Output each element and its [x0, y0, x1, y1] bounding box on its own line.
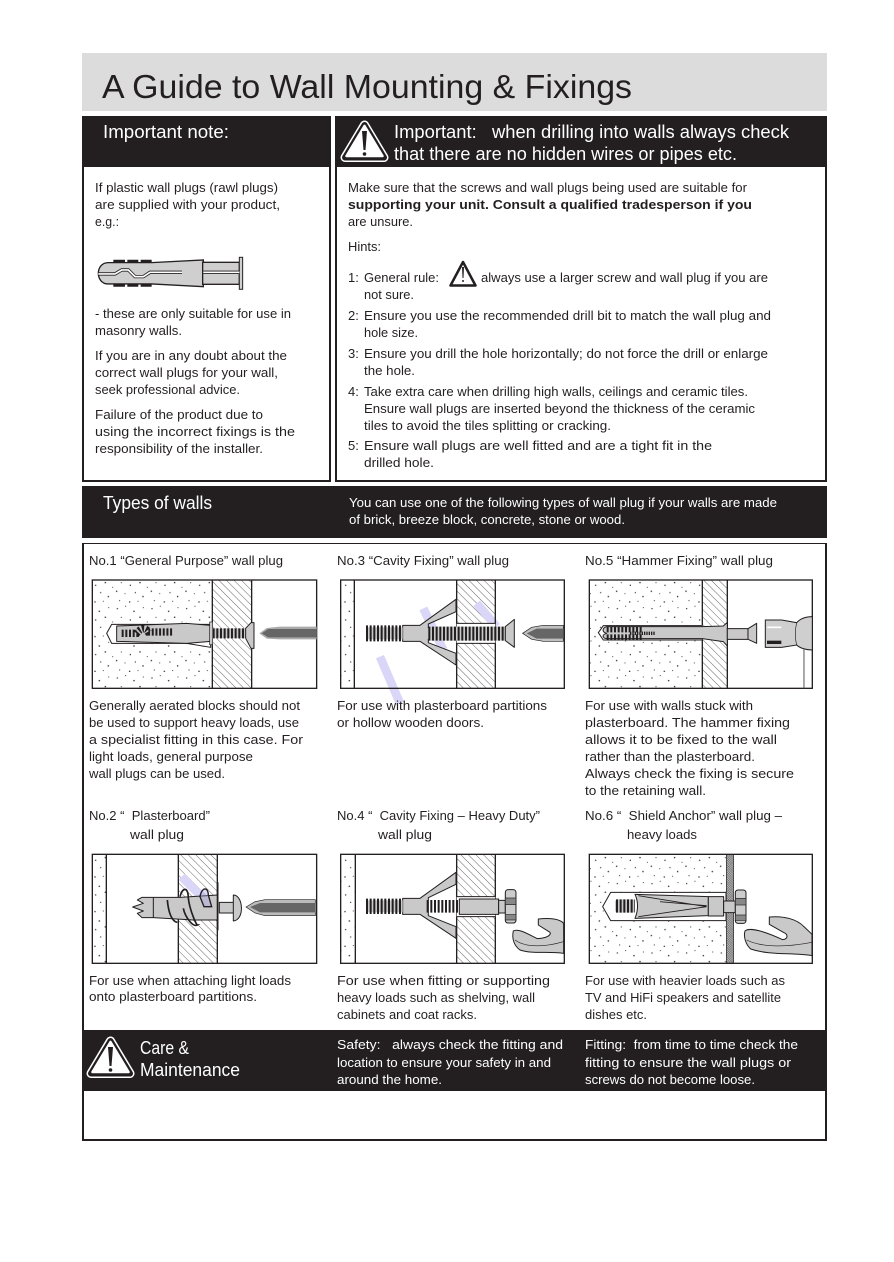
panel: important drilling warning and hints — [335, 116, 827, 481]
panel: important drilling warning and hints: Ensure you drill the hole horizontally; do not force the drill or enlarge — [364, 346, 768, 361]
panel: important drilling warning and hints: Hints: — [348, 239, 381, 254]
panel: important note: responsibility of the installer. — [95, 441, 263, 456]
panel: important drilling warning and hints: 4: — [348, 384, 359, 399]
panel: important note: masonry walls. — [95, 323, 182, 338]
description: No.5: Always check the fixing is secure — [585, 766, 794, 781]
panel: important drilling warning and hints: Ensure you use the recommended drill bit to match the wall plug and — [364, 308, 771, 323]
panel: important note: are supplied with your product, — [95, 197, 280, 212]
panel: care and maintenance band: Fitting: from time to time check the — [585, 1037, 798, 1052]
icon: warning triangle — [345, 125, 384, 158]
heading: No.6 Shield Anchor — [585, 808, 783, 842]
panel: care and maintenance band: Maintenance — [140, 1060, 240, 1080]
panel: important drilling warning and hints: Make sure that the screws and wall plugs being used are suitable for — [348, 180, 748, 195]
panel: important note: Important note: — [103, 122, 229, 142]
description: No.6: For use with heavier loads such as — [585, 973, 785, 988]
panel: important drilling warning and hints: Important: when drilling into walls always check — [394, 122, 790, 142]
description: No.3 — [337, 698, 548, 730]
panel: important drilling warning and hints: not sure. — [364, 287, 414, 302]
panel: care and maintenance band: around the home. — [337, 1072, 442, 1087]
panel: important note: If you are in any doubt about the — [95, 348, 287, 363]
panel: important drilling warning and hints: 5: — [348, 438, 359, 453]
panel: important drilling warning and hints: Ensure wall plugs are inserted beyond the thickness of the ceramic — [364, 401, 756, 416]
description: No.5: rather than the plasterboard. — [585, 749, 755, 764]
panel: care and maintenance band — [82, 1030, 827, 1091]
heading: No.4 Cavity Fixing Heavy Duty — [337, 808, 540, 842]
panel: care and maintenance band: Care & — [140, 1038, 189, 1058]
title banner: A Guide to Wall Mounting & Fixings — [102, 68, 632, 105]
description: No.3: or hollow wooden doors. — [337, 715, 484, 730]
icon: plastic wall plug — [98, 257, 243, 289]
heading band: types of walls: You can use one of the following types of wall plug if your walls are made — [349, 495, 777, 510]
diagram: No.1 General Purpose wall plug — [92, 580, 317, 688]
panel: important drilling warning and hints: always use a larger screw and wall plug if you are — [481, 270, 768, 285]
panel: important drilling warning and hints: tiles to avoid the tiles splitting or cracking. — [364, 418, 611, 433]
description: No.1 — [88, 698, 304, 781]
diagram: No.6 Shield Anchor wall plug — [589, 854, 812, 963]
panel: important drilling warning and hints: 1: — [348, 270, 359, 285]
description: No.5 — [585, 698, 794, 798]
panel: important note: - these are only suitable for use in — [95, 306, 291, 321]
description: No.6 — [585, 973, 785, 1022]
description: No.1: a specialist fitting in this case. For — [89, 732, 304, 747]
panel: important drilling warning and hints: drilled hole. — [364, 455, 434, 470]
panel: important note: seek professional advice. — [95, 382, 240, 397]
panel: important note: e.g.: — [95, 214, 119, 229]
panel frame: types of walls section — [82, 543, 827, 1140]
heading band: types of walls: of brick, breeze block, concrete, stone or wood. — [349, 512, 625, 527]
panel: important note: using the incorrect fixings is the — [95, 424, 295, 439]
panel: important drilling warning and hints: supporting your unit. Consult a qualified tradesperson if you — [348, 197, 752, 212]
description: No.5: plasterboard. The hammer fixing — [585, 715, 790, 730]
description: No.4 — [337, 973, 550, 1022]
icon: large wrench — [744, 917, 812, 956]
description: No.4: cabinets and coat racks. — [337, 1007, 477, 1022]
description: No.3: For use with plasterboard partitions — [337, 698, 548, 713]
panel: important note: Failure of the product due to — [95, 407, 263, 422]
panel: care and maintenance band: Safety: always check the fitting and — [337, 1037, 563, 1052]
panel: care and maintenance band: fitting to ensure the wall plugs or — [585, 1055, 792, 1070]
heading band: types of walls — [82, 486, 827, 538]
diagram: No.2 Plasterboard wall plug — [92, 854, 317, 963]
description: No.5: allows it to be fixed to the wall — [585, 732, 777, 747]
panel: important note — [82, 116, 331, 481]
panel: important drilling warning and hints: Take extra care when drilling high walls, ceilings and ceramic tiles. — [364, 384, 748, 399]
panel: important drilling warning and hints: 3: — [348, 346, 359, 361]
panel: important drilling warning and hints: 2: — [348, 308, 359, 323]
panel: important drilling warning and hints: General rule: — [364, 270, 439, 285]
description: No.1: light loads, general purpose — [89, 749, 253, 764]
description: No.2: For use when attaching light loads — [89, 973, 291, 988]
heading: No.4 Cavity Fixing Heavy Duty: No.4 “ Cavity Fixing – Heavy Duty” — [337, 808, 540, 823]
heading band: types of walls: Types of walls — [103, 493, 212, 513]
description: No.6: dishes etc. — [585, 1007, 647, 1022]
description: No.4: For use when fitting or supporting — [337, 973, 550, 988]
panel: important drilling warning and hints: are unsure. — [348, 214, 413, 229]
diagram: No.5 Hammer Fixing wall plug — [589, 580, 812, 688]
panel: care and maintenance band: screws do not become loose. — [585, 1072, 755, 1087]
heading: No.6 Shield Anchor: No.6 “ Shield Anchor” wall plug – — [585, 808, 783, 823]
panel: care and maintenance band: location to ensure your safety in and — [337, 1055, 551, 1070]
diagram: No.4 Cavity Fixing Heavy Duty wall plug — [341, 854, 564, 963]
diagram: No.3 Cavity Fixing wall plug — [341, 580, 564, 703]
description: No.1: be used to support heavy loads, use — [89, 715, 299, 730]
icon: small warning triangle — [450, 262, 476, 286]
heading: No.4 Cavity Fixing Heavy Duty: wall plug — [377, 827, 432, 842]
description: No.2: onto plasterboard partitions. — [89, 989, 257, 1004]
panel: important drilling warning and hints: that there are no hidden wires or pipes etc. — [394, 144, 737, 164]
heading: No.6 Shield Anchor: heavy loads — [627, 827, 697, 842]
panel: important drilling warning and hints: Ensure wall plugs are well fitted and are a tight fit in the — [364, 438, 712, 453]
heading: No.2 Plasterboard — [89, 808, 210, 842]
description: No.6: TV and HiFi speakers and satellite — [585, 990, 781, 1005]
icon: wrench — [513, 918, 564, 953]
panel: important drilling warning and hints: hole size. — [364, 325, 418, 340]
panel: important note: correct wall plugs for your wall, — [95, 365, 278, 380]
description: No.1: Generally aerated blocks should not — [89, 698, 300, 713]
description: No.4: heavy loads such as shelving, wall — [337, 990, 535, 1005]
description: No.2 — [89, 973, 291, 1004]
panel: important note: If plastic wall plugs (rawl plugs) — [95, 180, 278, 195]
heading: No.5 Hammer Fixing: No.5 “Hammer Fixing” wall plug — [585, 553, 773, 568]
panel: important drilling warning and hints: the hole. — [364, 363, 415, 378]
heading: No.3 Cavity Fixing: No.3 “Cavity Fixing” wall plug — [337, 553, 509, 568]
heading: No.1 General Purpose: No.1 “General Purpose” wall plug — [89, 553, 283, 568]
description: No.1: wall plugs can be used. — [88, 766, 225, 781]
description: No.5: For use with walls stuck with — [585, 698, 753, 713]
heading: No.2 Plasterboard: No.2 “ Plasterboard” — [89, 808, 210, 823]
description: No.5: to the retaining wall. — [585, 783, 706, 798]
title banner — [82, 53, 827, 111]
icon: care warning triangle — [91, 1041, 130, 1074]
heading: No.2 Plasterboard: wall plug — [129, 827, 184, 842]
